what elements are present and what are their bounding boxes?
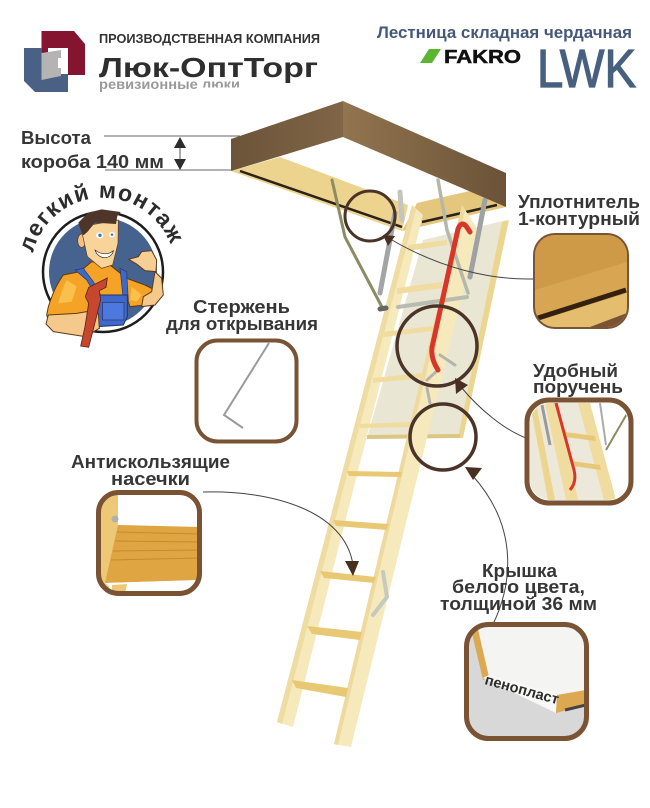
handrail label line two: поручень (533, 376, 623, 397)
callout: lid (440, 560, 597, 738)
notches thumbnail (96, 490, 202, 596)
notches label line two: насечки (111, 468, 190, 489)
arrow: handrail (455, 378, 526, 438)
fakro brand: FAKRO (444, 46, 521, 67)
company tagline: ПРОИЗВОДСТВЕННАЯ КОМПАНИЯ (99, 31, 320, 46)
model name: LWK (537, 39, 636, 99)
product heading (377, 24, 636, 99)
rod label: Стержень (193, 296, 290, 317)
badge disc (49, 218, 157, 326)
dimension label: Высота (21, 127, 92, 148)
callout: anti-slip notches (71, 451, 230, 596)
box height dimension (21, 127, 240, 172)
icon: double arrow (174, 137, 186, 170)
callout: opening rod (166, 296, 318, 442)
seal thumbnail (533, 233, 629, 329)
seal label: Уплотнитель (518, 191, 640, 212)
company name: Люк-ОптТорг (99, 52, 318, 83)
mascot badge (22, 182, 182, 348)
badge ring (43, 212, 163, 332)
callout: seal (518, 191, 640, 329)
lid label line two: белого цвета, (452, 576, 585, 597)
product title: Лестница складная чердачная (377, 24, 632, 42)
lid label: Крышка (482, 560, 558, 581)
badge caption: легкий монтаж (22, 182, 182, 253)
lid panel (367, 220, 509, 439)
frame beams (231, 157, 506, 231)
dimension value: короба 140 мм (21, 151, 164, 172)
arrow: seal (383, 235, 533, 279)
handrail label: Удобный (533, 360, 618, 381)
foam label: пенопласт (483, 672, 560, 708)
rod thumbnail (196, 340, 296, 442)
metal arms and brackets (332, 180, 485, 615)
arrow: lid (465, 467, 508, 624)
red handrail (432, 224, 470, 370)
ladder rails (277, 205, 478, 747)
lid thumbnail (466, 624, 586, 738)
highlight circles (345, 191, 477, 470)
notches label: Антискользящие (71, 451, 230, 472)
callout: handrail (527, 360, 631, 503)
logo mark (24, 31, 85, 92)
company logo (24, 31, 320, 92)
company subtitle: ревизионные люки (99, 77, 240, 92)
ladder illustration (231, 101, 509, 747)
ladder steps (292, 240, 447, 697)
icon: fakro mark (420, 49, 441, 63)
attic box (231, 101, 506, 207)
arrow: steps (203, 492, 359, 576)
seal label line two: 1-контурный (518, 208, 640, 229)
icon: rod (224, 343, 269, 428)
mascot: worker with wrench (46, 209, 163, 347)
handrail thumbnail (527, 400, 631, 503)
lid label line three: толщиной 36 мм (440, 593, 597, 614)
rod label line two: для открывания (166, 313, 318, 334)
